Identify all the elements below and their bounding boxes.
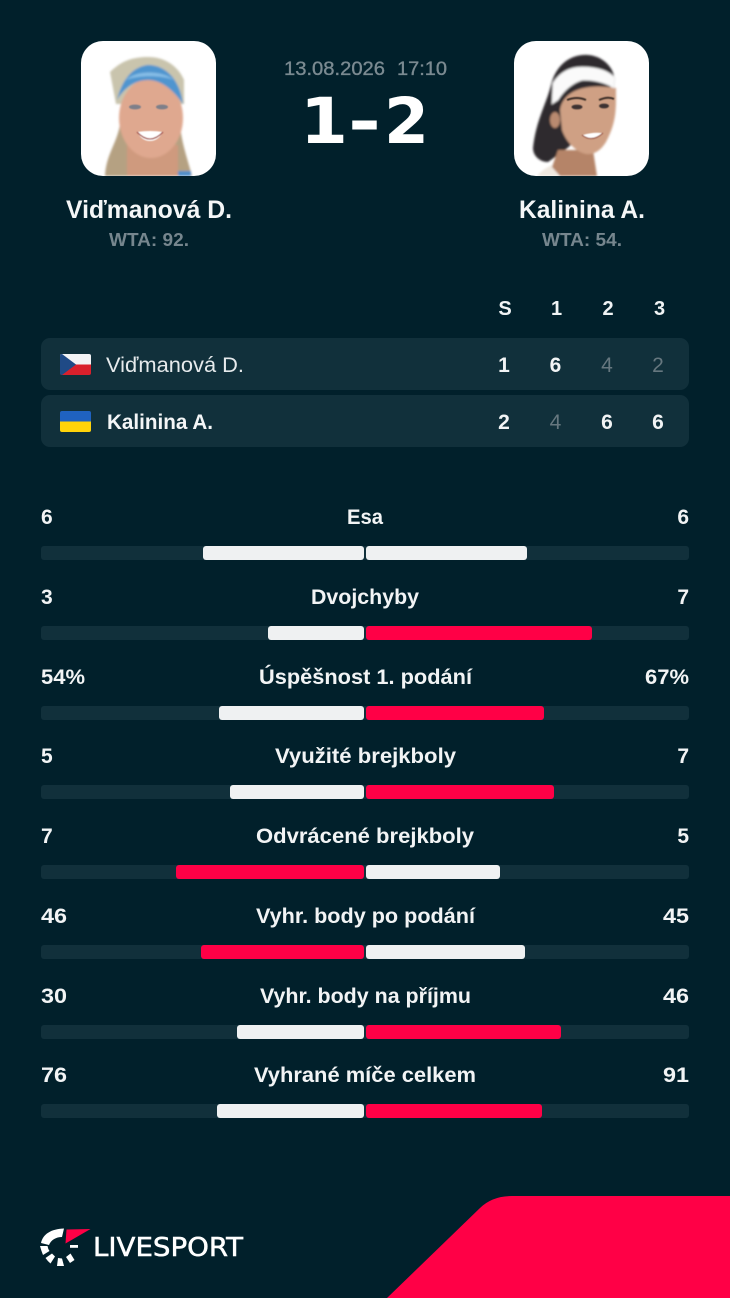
flag: Czech Republic — [60, 354, 91, 375]
match date and time: 17:10 — [397, 59, 447, 80]
player 1 photo — [81, 41, 216, 176]
stat: Dvojchyby — [41, 585, 689, 640]
match score: 1 — [300, 85, 348, 158]
stat: Úspěšnost 1. podání: 54% — [41, 666, 85, 689]
stat: Esa: 6 — [41, 506, 53, 529]
stat: Vyhr. body na příjmu: 46 — [663, 985, 689, 1008]
stat: Využité brejkboly: 7 — [677, 745, 689, 768]
row: Viďmanová D.: 2 — [652, 354, 664, 377]
match info — [284, 59, 447, 158]
stat: Dvojchyby: Dvojchyby — [311, 585, 419, 609]
Livesport logo — [40, 1228, 243, 1266]
match score: 2 — [384, 85, 429, 158]
stat: Vyhrané míče celkem — [41, 1063, 689, 1118]
match date and time: 13.08.2026 — [284, 59, 385, 80]
red corner shape — [387, 1196, 730, 1298]
stat: Využité brejkboly: 5 — [41, 745, 53, 768]
row: Kalinina A.: 6 — [601, 411, 613, 434]
stat: Vyhr. body po podání: Vyhr. body po podání — [256, 904, 476, 928]
match score — [300, 85, 429, 158]
stat: Vyhrané míče celkem: 91 — [663, 1064, 689, 1087]
stat: Vyhr. body na příjmu: Vyhr. body na příjmu — [260, 984, 471, 1008]
stat: Úspěšnost 1. podání — [41, 664, 689, 720]
table header: S — [498, 298, 512, 320]
player 1 name: Viďmanová D. — [66, 196, 232, 224]
stat: Vyhr. body po podání: 46 — [41, 905, 67, 928]
stat: Esa — [41, 505, 689, 560]
stat: Odvrácené brejkboly: 5 — [677, 825, 689, 848]
table header: 2 — [602, 298, 614, 320]
stat: Esa: 6 — [677, 506, 689, 529]
row: Kalinina A.: 6 — [652, 411, 664, 434]
stat: Využité brejkboly — [41, 744, 689, 799]
row: Viďmanová D. — [41, 338, 689, 390]
stat: Vyhr. body na příjmu: 30 — [41, 985, 67, 1008]
match date and time — [284, 59, 447, 80]
table header: 3 — [654, 298, 665, 320]
stat: Dvojchyby: 3 — [41, 586, 53, 609]
row: Kalinina A. — [41, 395, 689, 447]
stat: Esa: Esa — [347, 505, 384, 529]
player 2 name: Kalinina A. — [519, 196, 645, 224]
stat: Úspěšnost 1. podání: Úspěšnost 1. podání — [259, 664, 473, 689]
table header: 1 — [551, 298, 562, 320]
match score: - — [348, 85, 381, 158]
stat: Vyhr. body po podání — [41, 904, 689, 959]
stat: Úspěšnost 1. podání: 67% — [645, 666, 689, 689]
stat: Vyhr. body na příjmu — [41, 984, 689, 1039]
logo wordmark: LIVESPORT — [93, 1233, 243, 1263]
row: Kalinina A.: Kalinina A. — [107, 411, 213, 434]
row: Viďmanová D.: 1 — [498, 354, 510, 377]
row: Viďmanová D.: Viďmanová D. — [106, 354, 244, 377]
statistics — [41, 505, 689, 1118]
stat: Vyhr. body po podání: 45 — [663, 905, 689, 928]
row: Kalinina A.: 2 — [498, 411, 510, 434]
player 1 header — [66, 41, 232, 250]
stat: Odvrácené brejkboly: 7 — [41, 825, 53, 848]
stat: Odvrácené brejkboly — [41, 824, 689, 879]
player 1 ranking: WTA: 92. — [109, 229, 189, 250]
score table — [41, 298, 689, 447]
row: Viďmanová D.: 4 — [601, 354, 613, 377]
stat: Odvrácené brejkboly: Odvrácené brejkboly — [256, 824, 474, 848]
player 2 ranking: WTA: 54. — [542, 229, 622, 250]
stat: Dvojchyby: 7 — [677, 586, 689, 609]
player 2 photo — [514, 41, 649, 176]
stat: Využité brejkboly: Využité brejkboly — [275, 744, 456, 768]
table header — [498, 298, 665, 320]
flag: Ukraine — [60, 411, 91, 432]
player 2 header — [514, 41, 649, 250]
stat: Vyhrané míče celkem: 76 — [41, 1064, 67, 1087]
logo icon — [40, 1228, 90, 1266]
row: Viďmanová D.: 6 — [550, 354, 561, 377]
row: Kalinina A.: 4 — [550, 411, 562, 434]
stat: Vyhrané míče celkem: Vyhrané míče celkem — [254, 1063, 476, 1087]
